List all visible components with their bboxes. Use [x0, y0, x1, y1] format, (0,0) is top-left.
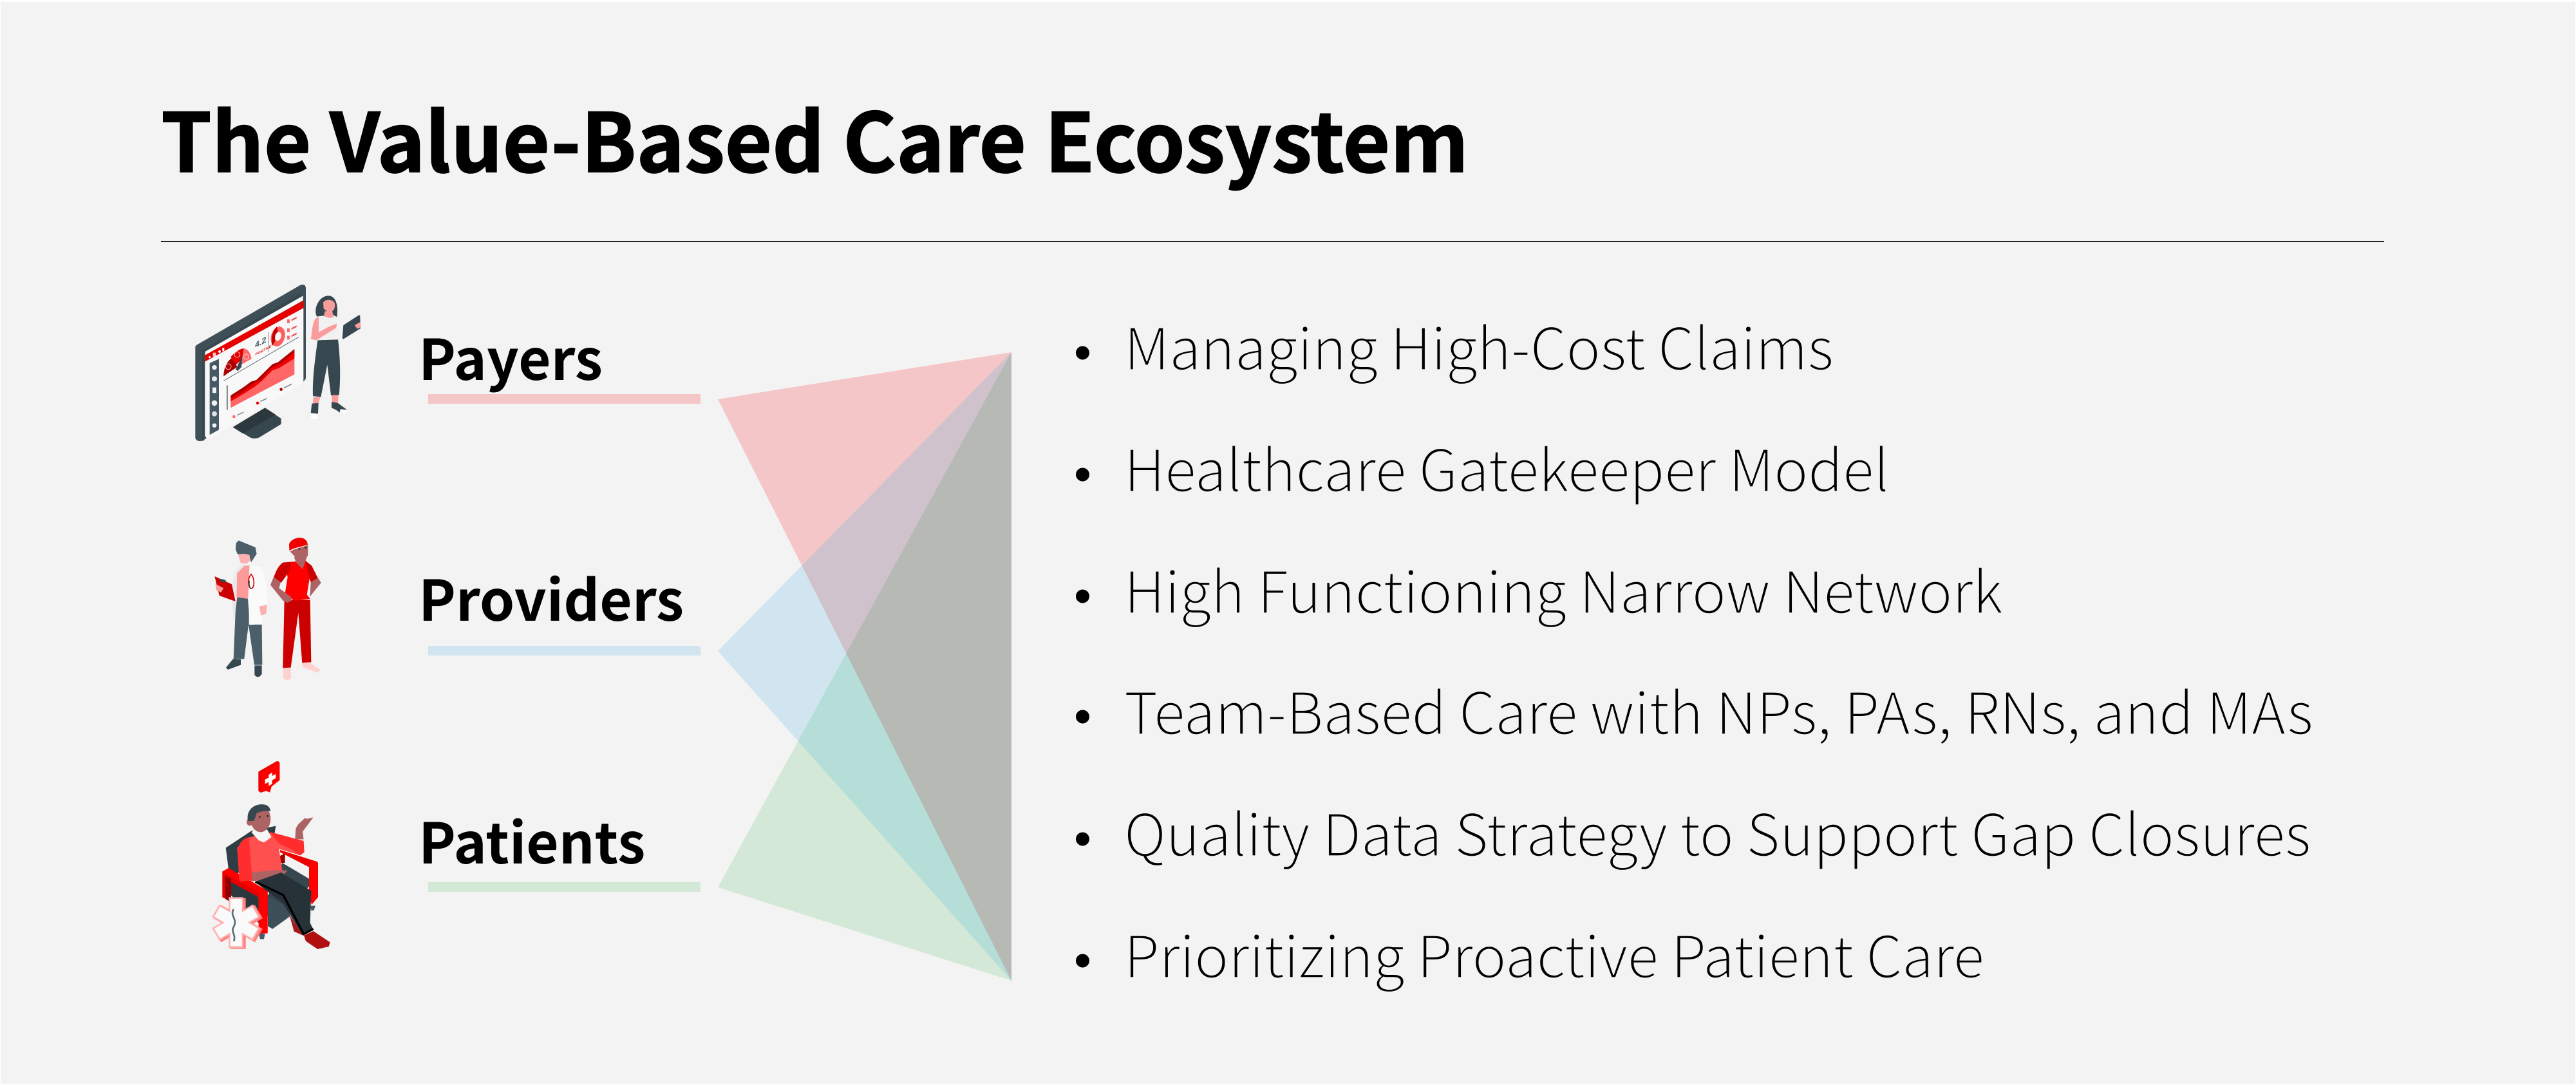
bullet item 5: Quality Data Strategy to Support Gap Closures [1124, 789, 2311, 873]
doctor [214, 540, 267, 677]
icon: payers illustration [195, 285, 361, 441]
medical chat bubble [258, 761, 279, 793]
gauge score: 4.2 [255, 335, 267, 350]
bullet item 4: Team-Based Care with NPs, PAs, RNs, and MAs [1124, 667, 2313, 751]
label: patients: Patients [418, 799, 645, 880]
area chart [230, 349, 294, 401]
sidebar [210, 359, 219, 435]
icon: providers illustration [214, 538, 321, 680]
screen [205, 296, 303, 440]
label: providers: Providers [418, 556, 684, 637]
bullet item 3: High Functioning Narrow Network [1124, 546, 2003, 630]
star of life [212, 897, 263, 949]
bullet item 2: Healthcare Gatekeeper Model [1124, 424, 1889, 508]
bullet list [1076, 303, 2313, 994]
label: payers [418, 316, 700, 404]
woman [311, 296, 361, 419]
donut chart [268, 325, 287, 348]
bullet item 1: Managing High-Cost Claims [1124, 303, 1834, 386]
monitor stand [233, 408, 281, 439]
converging triangles [718, 352, 1012, 981]
label: payers: Payers [418, 316, 603, 397]
title: The Value-Based Care Ecosystem [161, 78, 1469, 196]
patient [237, 804, 330, 949]
nurse [270, 538, 321, 680]
armchair [222, 826, 318, 939]
screen: POSITIVE [256, 344, 271, 357]
bullet item 6: Prioritizing Proactive Patient Care [1124, 911, 1984, 994]
gauge [223, 357, 237, 376]
monitor frame [195, 285, 306, 441]
icon: patients illustration [212, 761, 330, 949]
